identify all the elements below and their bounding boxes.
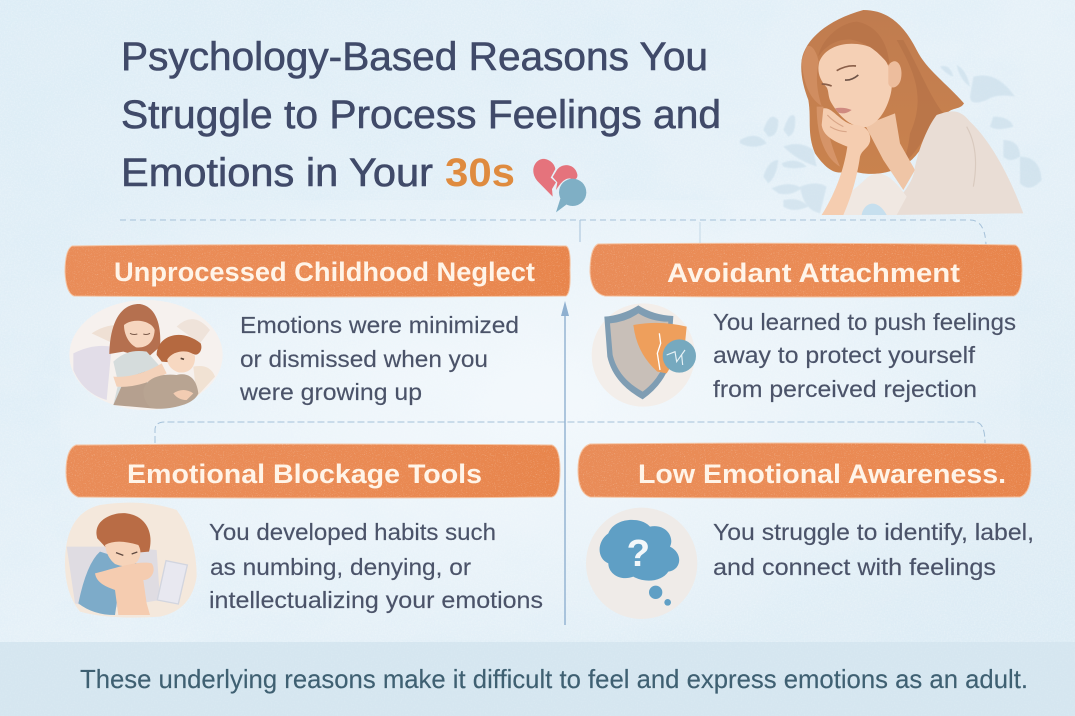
face <box>818 44 892 127</box>
icon: child hugging knees <box>65 503 197 618</box>
panel: low emotional awareness <box>578 442 1034 619</box>
description: as numbing, denying, or <box>210 554 471 580</box>
banner: Avoidant Attachment <box>667 258 960 288</box>
description <box>209 519 543 613</box>
panel: emotional blockage tools <box>65 443 561 618</box>
leaves behind woman <box>740 65 1042 213</box>
banner <box>590 242 1023 298</box>
banner: Emotional Blockage Tools <box>127 459 482 489</box>
figure <box>801 10 1023 215</box>
description: or dismissed when you <box>240 346 488 372</box>
neck <box>865 113 915 190</box>
description: You developed habits such <box>209 519 496 545</box>
arm and hand <box>822 108 870 215</box>
description: intellectualizing your emotions <box>209 587 543 613</box>
footer band: These underlying reasons make it difficult to feel and express emotions as an adult. <box>80 664 1028 694</box>
banner <box>578 442 1032 499</box>
description: Emotions were minimized <box>240 312 519 338</box>
description: You learned to push feelings <box>713 309 1016 335</box>
title <box>121 35 721 195</box>
description: You struggle to identify, label, <box>713 519 1034 545</box>
icon: shield <box>592 303 696 407</box>
title: Emotions in Your <box>121 151 433 195</box>
description <box>239 312 519 405</box>
banner <box>65 243 571 298</box>
description: from perceived rejection <box>713 376 977 402</box>
description: away to protect yourself <box>713 342 976 368</box>
shirt <box>890 111 1023 215</box>
description <box>713 519 1034 580</box>
description: and connect with feelings <box>713 554 996 580</box>
banner <box>66 443 561 499</box>
icon: thought cloud with question mark: ? <box>627 532 650 575</box>
hair back <box>801 10 964 174</box>
banner: Low Emotional Awareness. <box>638 459 1006 489</box>
icon: thought cloud with question mark <box>586 508 697 619</box>
title: Psychology-Based Reasons You <box>121 35 708 79</box>
connector lines <box>120 220 986 625</box>
panel: avoidant attachment <box>590 242 1023 407</box>
title: 30s <box>445 151 515 195</box>
illustration: sad woman <box>740 10 1042 215</box>
footer band <box>0 642 1075 716</box>
description: were growing up <box>239 379 422 405</box>
title: Struggle to Process Feelings and <box>121 93 721 137</box>
icon: broken heart <box>533 159 586 212</box>
hair front <box>818 22 889 65</box>
description <box>713 309 1016 402</box>
panel: unprocessed childhood neglect <box>65 243 571 410</box>
icon: two children <box>69 300 223 410</box>
banner: Unprocessed Childhood Neglect <box>114 257 535 287</box>
